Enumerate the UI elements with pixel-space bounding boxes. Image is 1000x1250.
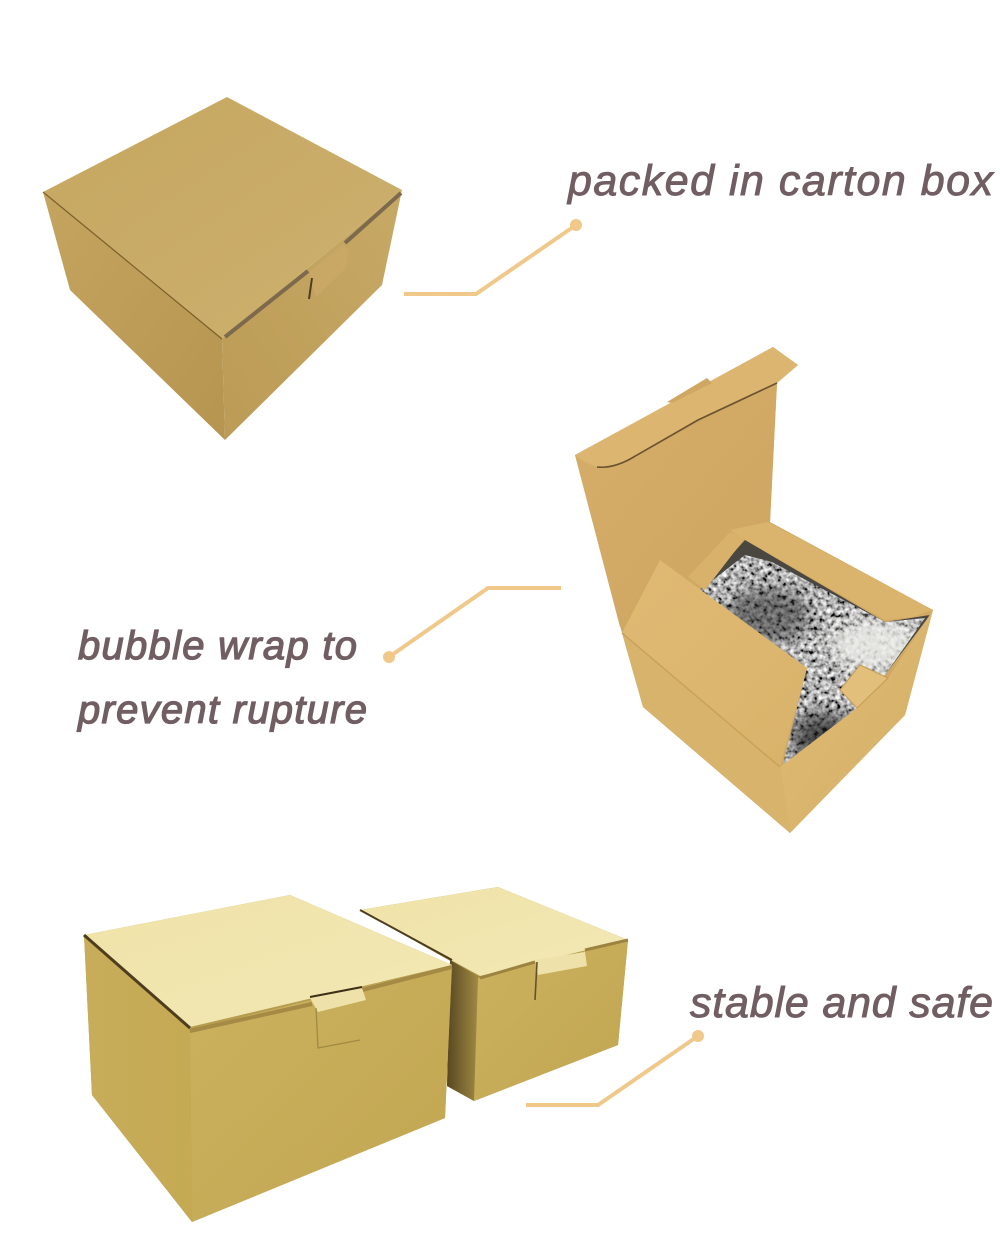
small box tab slit (535, 962, 537, 1000)
inner wall (688, 532, 745, 590)
right box face (780, 610, 933, 833)
bubble wrap (700, 555, 925, 765)
large box top face (84, 895, 452, 1027)
large box tab slit (316, 1008, 360, 1048)
lid outer flap (575, 347, 798, 467)
large box silhouette base (84, 895, 452, 1222)
photo: two carton boxes side by side (84, 887, 628, 1222)
lid inner panel (575, 383, 777, 627)
large box (84, 895, 452, 1222)
label: packed in carton box: packed in carton box (566, 157, 994, 205)
callout line: bubble wrap (383, 588, 561, 663)
closing tab (310, 245, 349, 297)
small box front face (474, 940, 628, 1101)
small box flap edge (480, 962, 535, 978)
front flap fold (622, 633, 780, 767)
front flap (622, 560, 807, 767)
label: bubble wrap to: bubble wrap to (78, 624, 357, 668)
box left face (43, 192, 225, 440)
back flap (730, 522, 933, 620)
large box flap edge right (362, 967, 452, 990)
corrugated edge right (345, 193, 401, 243)
large box left face (84, 935, 192, 1222)
callout line: carton box (404, 219, 582, 294)
dark interior (700, 540, 930, 770)
photo: closed carton box (43, 97, 402, 440)
small box top face (360, 887, 628, 976)
left box face (622, 633, 790, 833)
small box tab (535, 952, 587, 975)
small box silhouette base (360, 887, 628, 1101)
left seam (43, 192, 222, 339)
label: prevent rupture: prevent rupture (77, 688, 367, 732)
photo: open carton with bubble wrap (575, 347, 940, 833)
small box (360, 887, 628, 1101)
small box dark seam (360, 910, 452, 960)
large box tab (310, 988, 366, 1012)
box silhouette base (575, 347, 933, 833)
lid tab (667, 378, 712, 403)
tab slit (309, 278, 312, 299)
callout line: stable and safe (526, 1030, 704, 1105)
box top face (43, 97, 402, 339)
small box shadow side (447, 960, 480, 1101)
lid edge shadow (597, 383, 777, 467)
large box dark seam (84, 935, 190, 1028)
corrugated edge (225, 271, 308, 337)
closing tab (840, 665, 888, 708)
label: stable and safe: stable and safe (690, 979, 993, 1027)
large box tab shadow (310, 987, 362, 997)
small box flap edge right (585, 940, 628, 950)
large box front face (190, 965, 452, 1222)
large box flap edge (190, 1004, 312, 1031)
box right face (222, 190, 402, 440)
